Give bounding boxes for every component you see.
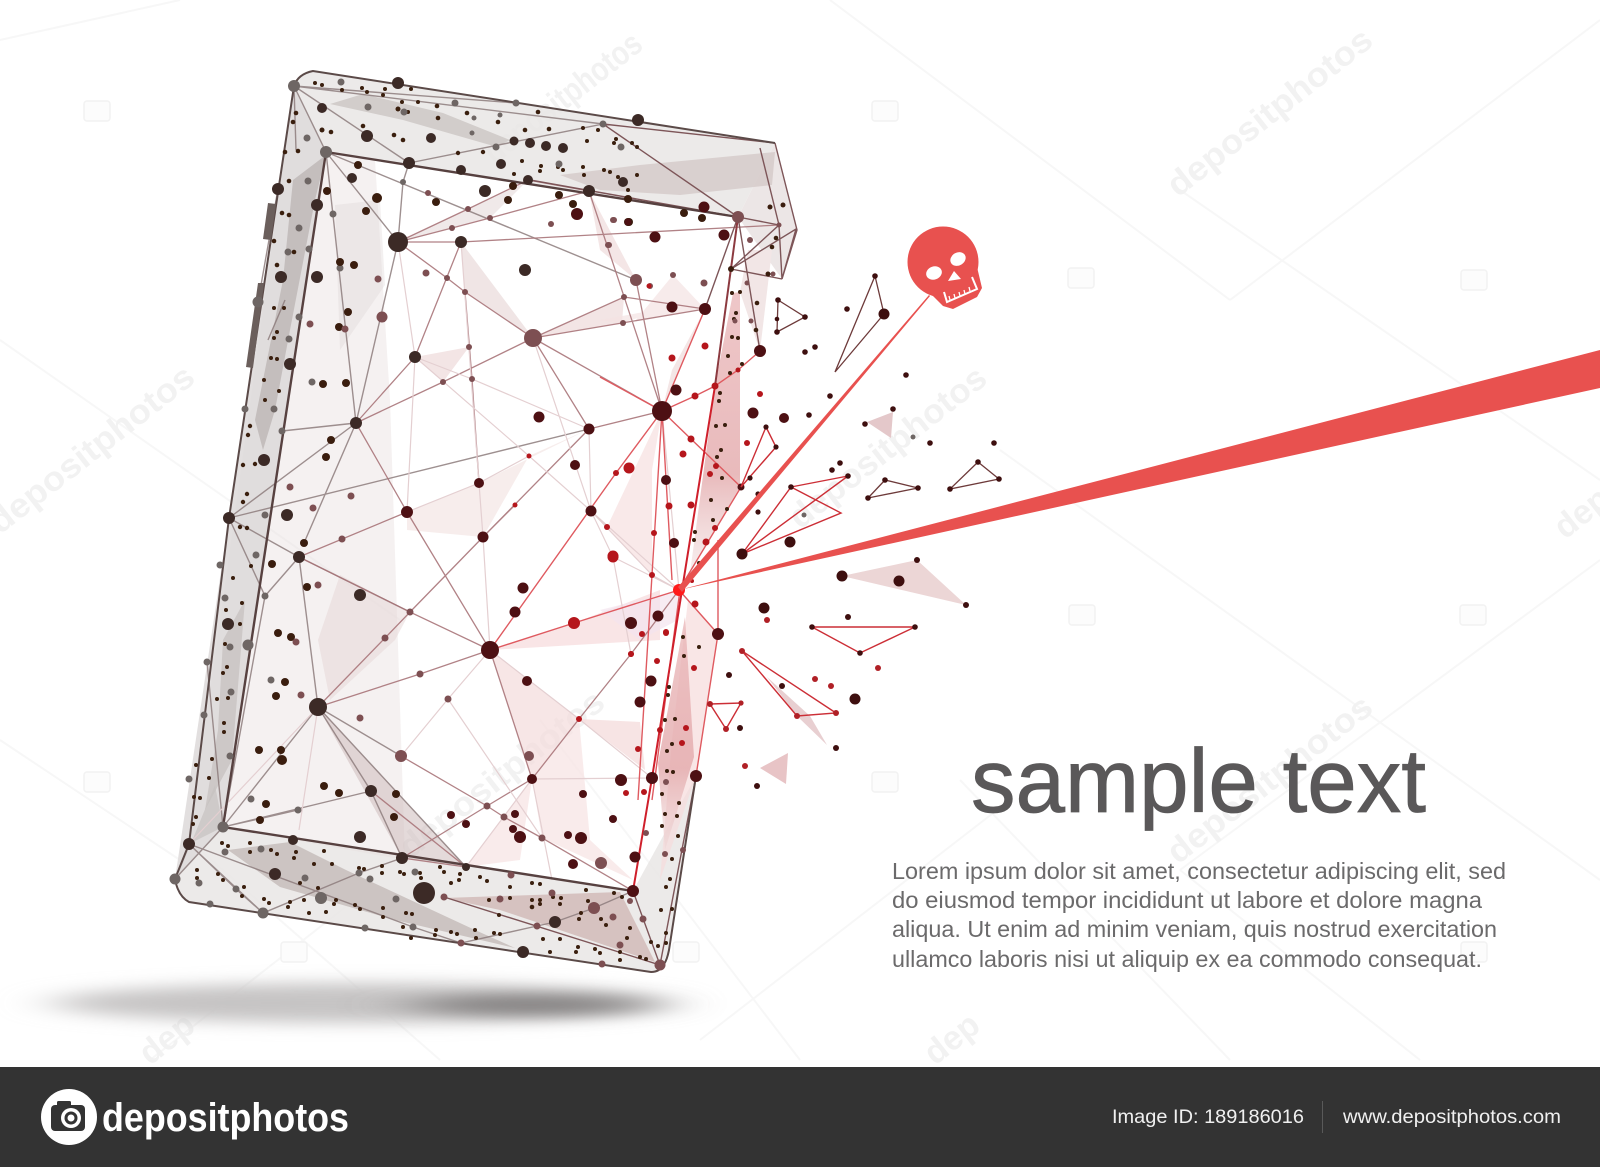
dark red nodes [401,202,789,897]
body text: do eiusmod tempor incididunt ut labore et dolore magna [892,887,1483,913]
phone ground shadow [50,983,670,1023]
brown fragment outlines [777,276,999,498]
phone inner outline [223,152,738,891]
icon: camera logo [41,1089,97,1145]
heading: sample text [971,732,1426,832]
mesh lines: frame right corner [444,124,797,965]
footer bar [0,1067,1600,1167]
red fragment outlines [710,427,915,729]
logo wordmark: depositphotos [102,1096,349,1140]
watermark pattern: depositphotos [477,24,650,171]
mauve midpoint nodes [286,190,782,970]
impact point [673,584,685,596]
mesh lines: mauve centre zone [299,180,779,891]
image id: Image ID: 189186016 [1112,1106,1304,1128]
side buttons [246,203,276,368]
website url: www.depositphotos.com [1342,1106,1561,1128]
red nodes [512,284,763,796]
watermark pattern: depositphotos [782,359,994,536]
watermark pattern: depositphotos [392,682,612,866]
tiny dark specks on frame [191,81,778,962]
small brown-black nodes [255,161,786,824]
phone outer outline [175,71,775,972]
thick red beam [679,350,1600,590]
phone frame faces [175,71,797,972]
watermark pattern: dep [917,1005,987,1072]
mesh lines: grey-brown left zone [175,86,636,943]
thin red beam to skull [678,295,930,592]
body text: ullamco laboris nisi ut aliquip ex ea commodo consequat. [892,946,1482,972]
dark fragment dots [726,273,1002,789]
dark brown nodes, left half [183,77,644,958]
watermark pattern: dep [132,1005,202,1072]
grey semi-transparent nodes on frame [170,78,916,932]
shattered fragments [707,273,1002,789]
mesh lines: red impact zone [490,309,760,800]
red fragment dots [707,617,881,769]
inner right edge [633,217,738,891]
mesh lines: pale connectors [189,242,679,880]
body text: Lorem ipsum dolor sit amet, consectetur adipiscing elit, sed [892,858,1506,884]
watermark pattern: depositphotos [1160,687,1380,871]
body text [892,858,1506,972]
icon: skull [908,226,982,309]
wireframe phone [170,71,916,972]
watermark pattern: depositphotos [1160,20,1380,204]
translucent mesh facets [223,152,772,880]
pale fragment triangles [760,412,966,784]
body text: aliqua. Ut enim ad minim veniam, quis nostrud exercitation [892,916,1497,942]
